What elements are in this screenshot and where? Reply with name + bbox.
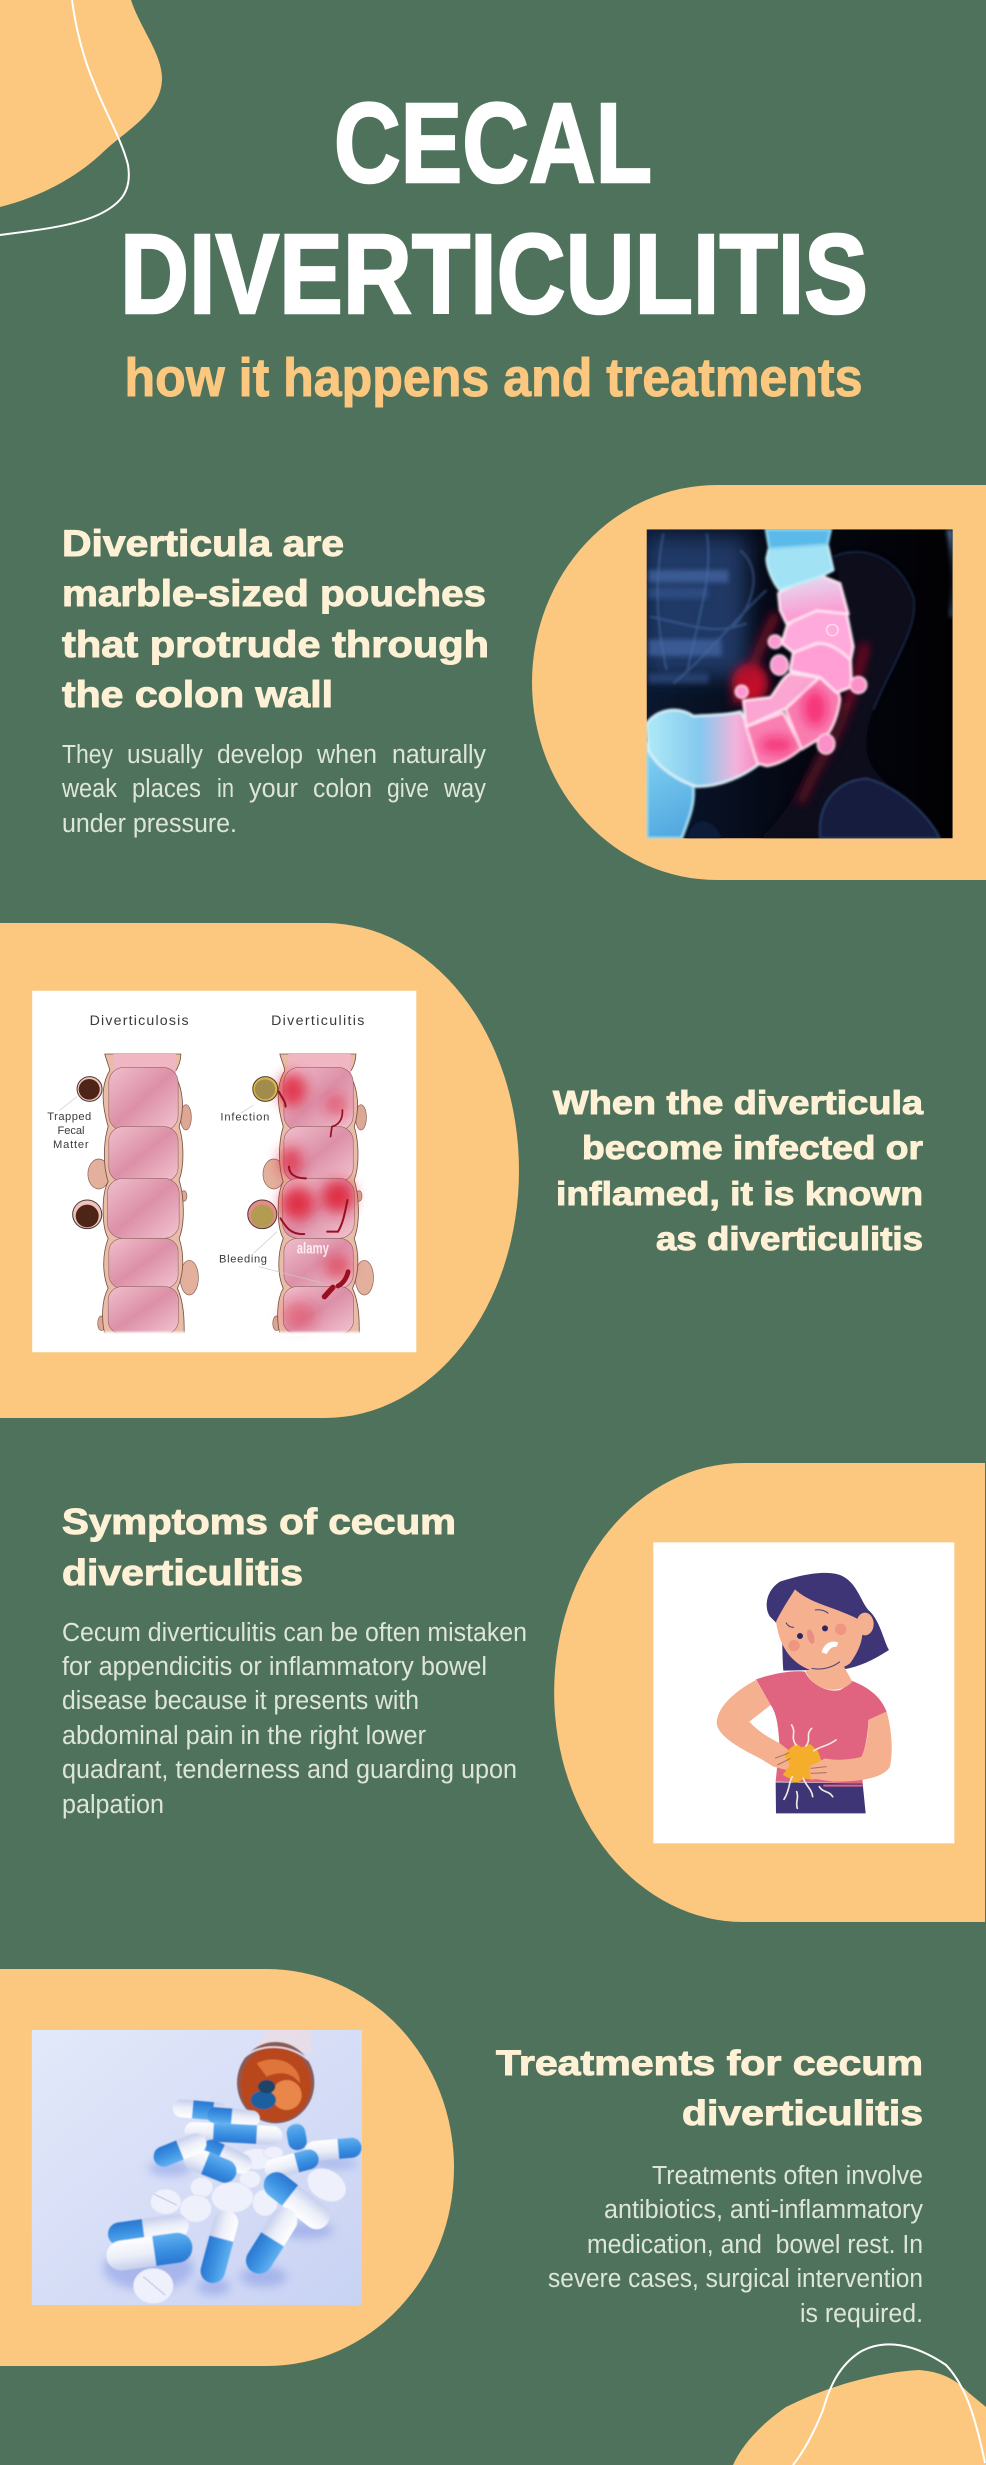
heading: diverticula: Diverticula are [62,523,344,564]
shadows [103,2158,357,2295]
face details [786,1610,846,1669]
heading: symptoms: diverticulitis [62,1552,303,1593]
heading: symptoms [62,1501,456,1593]
panel shape [554,1463,985,1922]
panel: diverticulosis vs diverticulitis [0,923,519,1418]
bottle [237,2042,314,2123]
heading: diverticula: the colon wall [62,674,333,715]
heading: diverticula: marble-sized pouches [62,573,486,614]
image: diverticulosis and diverticulitis diagram [32,991,416,1352]
body text: diverticula: way [443,775,486,803]
heading: diverticula [62,523,489,715]
diagram labels: Diverticulosis [90,1012,189,1028]
hair [767,1573,889,1671]
body text: diverticula: your [249,775,298,803]
right arm [809,1712,892,1782]
body text: diverticula: They [62,741,113,769]
subtitle: how it happens and treatments [124,348,862,408]
red glow [732,613,865,803]
left colon [88,1054,198,1334]
pain lines [784,1725,836,1808]
body text: diverticula: places [132,775,201,803]
face [776,1589,862,1671]
body text: diverticula: in [217,775,234,803]
body text: symptoms: disease because it presents with [62,1687,419,1715]
leader line [59,1097,77,1111]
panel: diverticula [532,485,986,880]
heading: symptoms: Symptoms of cecum [62,1501,456,1542]
body text: diverticula: under pressure. [62,810,237,838]
decorative blob: bottom right [733,2344,986,2465]
heading: infected or inflamed: inflamed, it is known [556,1175,923,1212]
image: woman with abdominal pain [653,1542,954,1843]
diagram labels: Fecal [57,1125,85,1137]
pants [776,1782,866,1813]
diagram labels: Matter [53,1139,89,1151]
body text: symptoms: for appendicitis or inflammatory bowel [62,1653,487,1681]
shirt [756,1671,887,1783]
infected pouches [248,1077,278,1229]
body text: diverticula: colon [313,775,372,803]
image: diverticulosis and diverticulitis diagram: alamy [297,1240,329,1257]
panel shape [0,1969,454,2366]
heading: treatments [496,2044,923,2133]
title: CECAL [334,80,652,206]
body text: symptoms: Cecum diverticulitis can be often mistaken [62,1619,527,1647]
body text: diverticula: naturally [392,741,486,769]
body text: symptoms: abdominal pain in the right lower [62,1722,426,1750]
body text: treatments: severe cases, surgical intervention [548,2265,923,2293]
body text: symptoms [62,1619,527,1819]
finger lines [775,1753,827,1773]
diagram labels: Trapped [47,1111,91,1123]
body text: diverticula: when [316,741,377,769]
capsules [104,2099,362,2286]
panel shape [532,485,986,880]
image: spilled capsules and pill bottle [32,2030,362,2305]
heading: infected or inflamed: When the diverticula [553,1084,924,1121]
panel: treatments [0,1969,454,2366]
diagram labels [47,1012,364,1266]
title: DIVERTICULITIS [120,211,868,337]
body text: treatments: medication, and bowel rest. In [587,2231,923,2259]
body text: treatments [548,2162,923,2328]
body text: treatments: Treatments often involve [652,2162,923,2190]
body text: symptoms: palpation [62,1791,164,1819]
pain burst [783,1743,822,1785]
neck [806,1667,852,1690]
body text: treatments: is required. [800,2300,923,2328]
diagram labels: Bleeding [219,1254,267,1266]
body text: diverticula: weak [61,775,117,803]
left arm [717,1680,793,1771]
heading: treatments: diverticulitis [682,2094,923,2133]
right colon [263,1054,373,1334]
bottle neck [257,2030,312,2053]
heading: infected or inflamed: as diverticulitis [656,1220,923,1257]
title [120,80,868,337]
panel: symptoms [554,1463,985,1922]
heading: treatments: Treatments for cecum [496,2044,923,2083]
heading: diverticula: that protrude through [62,624,489,665]
heading: infected or inflamed: become infected or [582,1129,923,1166]
tablets [133,2147,352,2304]
colon segments [647,529,867,838]
body text: diverticula: usually [127,741,203,769]
body text: diverticula: develop [217,741,303,769]
left trapped pouches [73,1077,102,1229]
diagram labels: Infection [220,1112,269,1124]
image: colon with diverticula x-ray render [647,529,953,838]
heading: infected or inflamed [553,1084,924,1257]
body text: diverticula: give [387,775,429,803]
diagram labels: Diverticulitis [271,1012,364,1028]
body text: diverticula [61,741,486,838]
panel shape [0,923,519,1418]
ear [856,1613,874,1635]
bleeding marks [279,1092,348,1297]
body text: treatments: antibiotics, anti-inflammatory [604,2196,923,2224]
inflammation glow [278,1073,354,1329]
decorative blob: top left [0,0,162,235]
body text: symptoms: quadrant, tenderness and guarding upon [62,1756,517,1784]
